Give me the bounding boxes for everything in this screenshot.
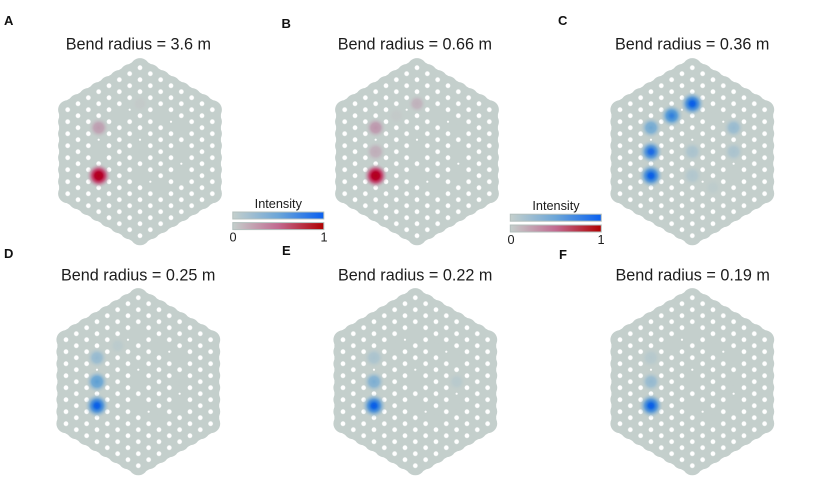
label D: D (4, 246, 13, 261)
panel A (4, 13, 216, 240)
legend title: Intensity (255, 197, 303, 211)
label E: E (282, 243, 291, 258)
blue colour bar (510, 214, 601, 221)
fiber cross-section A (64, 64, 216, 240)
legend right (507, 199, 605, 247)
title A: Bend radius = 3.6 m (66, 35, 211, 53)
scale labels: 0 (507, 233, 515, 247)
panel F (559, 247, 770, 470)
title B: Bend radius = 0.66 m (338, 35, 492, 53)
fiber cross-section D (62, 294, 214, 470)
label A: A (4, 13, 14, 28)
label C: C (558, 13, 568, 28)
red colour bar (510, 225, 601, 232)
scale labels: 1 (597, 233, 605, 247)
panel C (558, 13, 769, 240)
red colour bar (233, 223, 324, 230)
fiber cross-section C (616, 64, 768, 240)
scale labels: 0 (229, 231, 237, 245)
title F: Bend radius = 0.19 m (616, 267, 770, 285)
label F: F (559, 247, 567, 262)
panel E (282, 243, 492, 470)
legend title: Intensity (532, 199, 580, 213)
title E: Bend radius = 0.22 m (338, 267, 492, 285)
panel D (4, 246, 215, 470)
title C: Bend radius = 0.36 m (615, 35, 769, 53)
fiber cross-section B (341, 64, 493, 240)
legend left (229, 197, 328, 245)
scale labels: 1 (320, 231, 328, 245)
title D: Bend radius = 0.25 m (61, 267, 215, 285)
blue colour bar (233, 212, 324, 219)
label B: B (282, 16, 291, 31)
panel B (282, 16, 493, 240)
fiber cross-section F (616, 294, 768, 470)
fiber cross-section E (339, 294, 491, 470)
